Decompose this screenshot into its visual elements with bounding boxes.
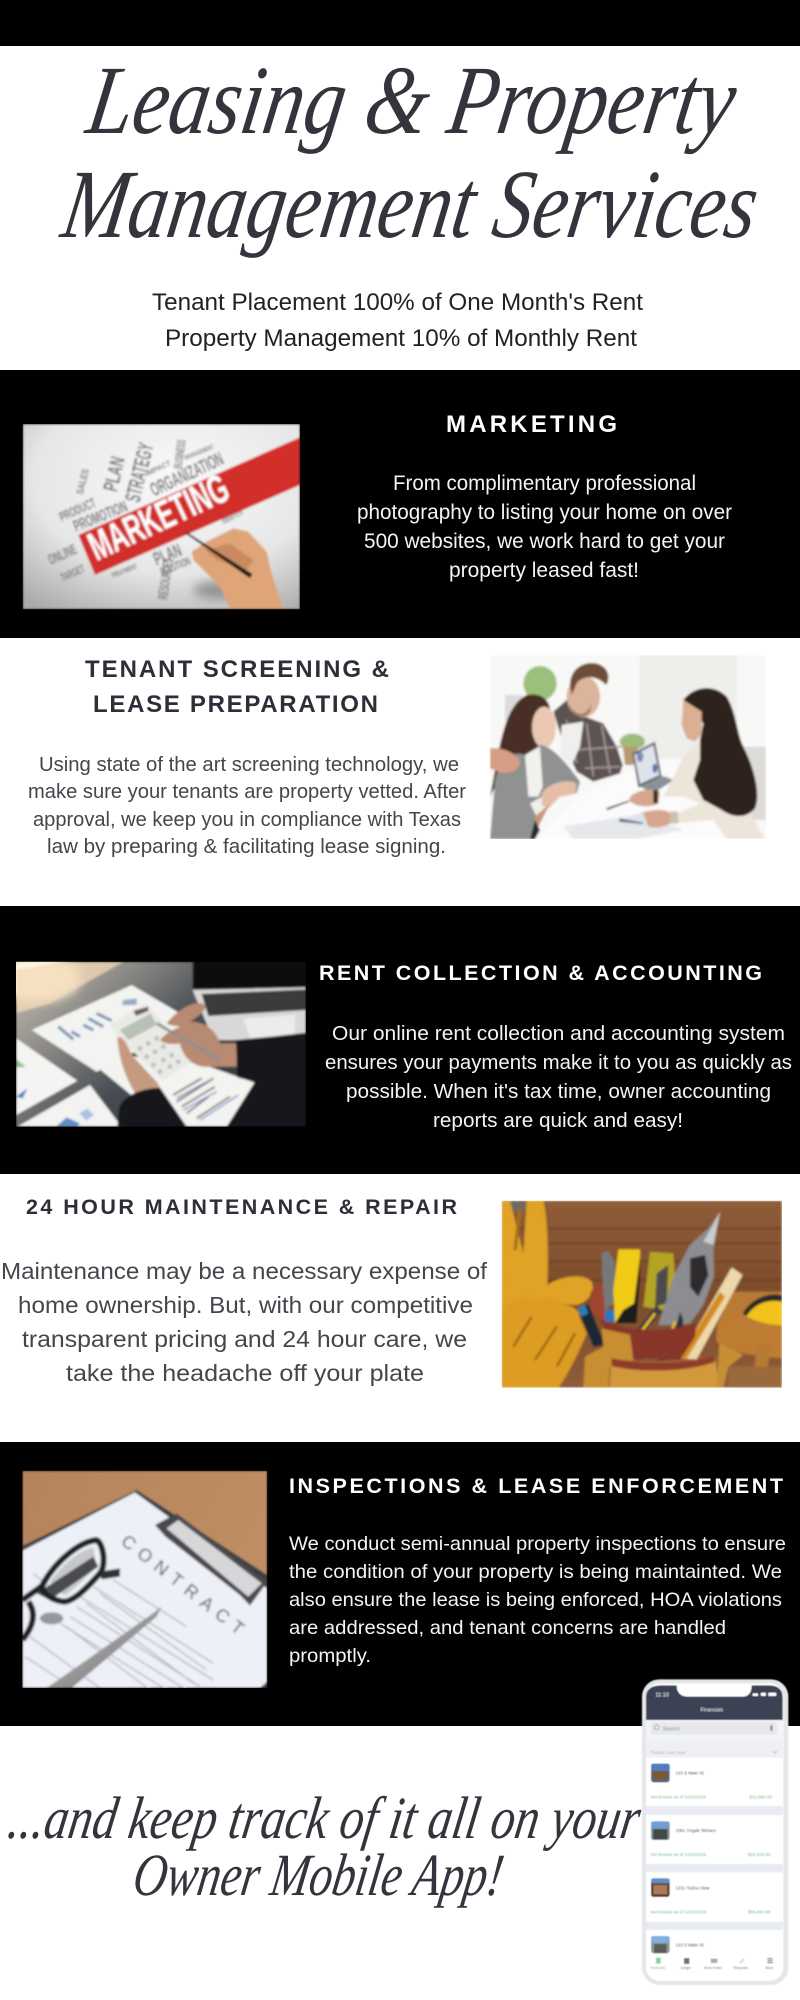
bottom tab bar: More [766, 1966, 773, 1970]
period filter [646, 1738, 783, 1758]
list item: property three [651, 1878, 771, 1914]
text: marketing description [357, 472, 732, 582]
photo: marketing word cloud with hand: PROMOTION [71, 498, 130, 535]
bottom tab bar: Financials [650, 1966, 666, 1970]
text: marketing description: photography to listing your home on over [357, 501, 732, 524]
text: marketing description: 500 websites, we work hard to get your [364, 530, 725, 553]
separator [646, 1922, 783, 1930]
heading: tenant screening [85, 656, 389, 718]
title [54, 47, 766, 259]
text: maintenance description: Maintenance may be a necessary expense of [1, 1258, 487, 1284]
list item: property one [651, 1764, 772, 1800]
text: inspections description: promptly. [289, 1645, 371, 1667]
text: rent collection description [325, 1022, 792, 1132]
list item: property two [651, 1821, 771, 1857]
search bar [646, 1720, 783, 1738]
photo: marketing word cloud with hand: ONLINE [46, 542, 80, 569]
photo: marketing word cloud with hand: PRODUCT [57, 495, 98, 524]
photo: couple meeting with agent [490, 655, 766, 839]
closing tagline: Owner Mobile App! [129, 1842, 508, 1909]
app header: 11:10 [655, 1692, 669, 1698]
photo: marketing word cloud with hand: TREATMENT [110, 561, 139, 580]
text: inspections description [289, 1533, 786, 1667]
subtitle: pricing [152, 289, 643, 352]
text: inspections description: the condition of your property is being maintainted. We [289, 1561, 782, 1583]
text: tenant screening description: law by preparing & facilitating lease signing. [47, 835, 446, 858]
photo: marketing word cloud with hand: IMPACT [144, 458, 173, 478]
heading: inspections: INSPECTIONS & LEASE ENFORCEMENT [289, 1474, 783, 1498]
list item: property one: Net income as of 12/31/2019 [651, 1795, 707, 1800]
phone mockup: owner mobile app [641, 1678, 790, 1986]
list item: property two: Net income as of 12/31/2019 [651, 1852, 707, 1857]
bottom tab bar: Requests [734, 1966, 748, 1970]
text: tenant screening description: make sure your tenants are property vetted. After [28, 780, 466, 803]
panel: title header [54, 47, 766, 352]
panel: tenant screening [0, 638, 800, 906]
photo: contract on clipboard with glasses and pen [22, 1470, 268, 1688]
photo: marketing word cloud with hand: RESOURCES [154, 557, 176, 600]
list item: property one: 123 S Main St. [675, 1771, 705, 1776]
app header [646, 1685, 783, 1720]
search bar: Search [663, 1726, 680, 1732]
photo: tool belt and gloves [502, 1200, 782, 1388]
period filter: Period: Last year [651, 1750, 686, 1755]
text: marketing description: property leased fast! [449, 559, 639, 582]
photo: marketing word cloud with hand: TARGET [59, 563, 87, 584]
list item: property four: 123 S Main St. [675, 1943, 705, 1948]
panel: inspections [0, 1442, 800, 1726]
text: maintenance description [1, 1258, 487, 1386]
heading: tenant screening: TENANT SCREENING & [85, 656, 389, 683]
list item: property three: $56,890.00 [748, 1909, 771, 1914]
panel: marketing [0, 370, 800, 638]
subtitle: pricing: Property Management 10% of Monthly Rent [165, 325, 637, 352]
photo: calculator and financial charts [16, 962, 306, 1127]
text: tenant screening description [28, 753, 466, 858]
separator [646, 1806, 783, 1815]
list item: property two: 1061 Hogak Terrace [675, 1828, 716, 1833]
bottom tab bar: Send Funds [704, 1966, 722, 1970]
phone frame [642, 1679, 788, 1985]
photo: marketing word cloud with hand: PLAN [99, 454, 130, 494]
text: rent collection description: Our online rent collection and accounting system [332, 1022, 785, 1045]
photo: contract on clipboard with glasses and pen: CONTRACT [118, 1531, 248, 1639]
heading: tenant screening: LEASE PREPARATION [93, 691, 378, 718]
bottom tab bar [646, 1953, 783, 1972]
panel: rent collection [0, 906, 800, 1174]
list item: property three: Net income as of 12/31/2019 [651, 1909, 707, 1914]
photo: marketing word cloud with hand: SALES [75, 468, 92, 496]
photo: marketing word cloud with hand: IDENTITY [220, 508, 245, 526]
panel: maintenance [0, 1174, 800, 1442]
photo: marketing word cloud with hand: SOLUTION [159, 555, 192, 578]
photo: marketing word cloud with hand: PLAN [150, 539, 184, 569]
heading: marketing: MARKETING [446, 411, 617, 438]
heading: maintenance: 24 HOUR MAINTENANCE & REPAIR [26, 1195, 457, 1219]
text: maintenance description: transparent pricing and 24 hour care, we [22, 1326, 467, 1352]
separator [646, 1864, 783, 1872]
text: maintenance description: take the headache off your plate [66, 1360, 424, 1386]
bottom tab bar: Ledger [681, 1966, 692, 1970]
text: rent collection description: possible. When it's tax time, owner accounting [346, 1080, 771, 1103]
list item: property three: 1231 Todzu View [675, 1885, 710, 1890]
text: rent collection description: ensures your payments make it to you as quickly as [325, 1051, 792, 1074]
photo: marketing word cloud with hand: MANAGEMENT [184, 444, 215, 462]
closing tagline [4, 1785, 646, 1909]
text: marketing description: From complimentary professional [393, 472, 696, 495]
subtitle: pricing: Tenant Placement 100% of One Month's Rent [152, 289, 643, 316]
text: inspections description: are addressed, and tenant concerns are handled [289, 1617, 726, 1639]
text: maintenance description: home ownership. But, with our competitive [18, 1292, 473, 1318]
heading: rent collection: RENT COLLECTION & ACCOUNTING [319, 961, 762, 985]
photo: marketing word cloud with hand [22, 424, 300, 610]
text: tenant screening description: approval, we keep you in compliance with Texas [33, 808, 461, 831]
top black band [0, 0, 800, 46]
text: inspections description: also ensure the lease is being enforced, HOA violations [289, 1589, 782, 1611]
app header: Financials [701, 1708, 724, 1714]
text: rent collection description: reports are quick and easy! [433, 1109, 683, 1132]
list item: property four [651, 1936, 705, 1953]
closing tagline: ...and keep track of it all on your [4, 1785, 646, 1852]
list item: property one: $12,560.00 [749, 1795, 772, 1800]
list item: property two: $22,500.00 [748, 1852, 771, 1857]
text: inspections description: We conduct semi-annual property inspections to ensure [289, 1533, 786, 1555]
text: tenant screening description: Using state of the art screening technology, we [39, 753, 459, 776]
